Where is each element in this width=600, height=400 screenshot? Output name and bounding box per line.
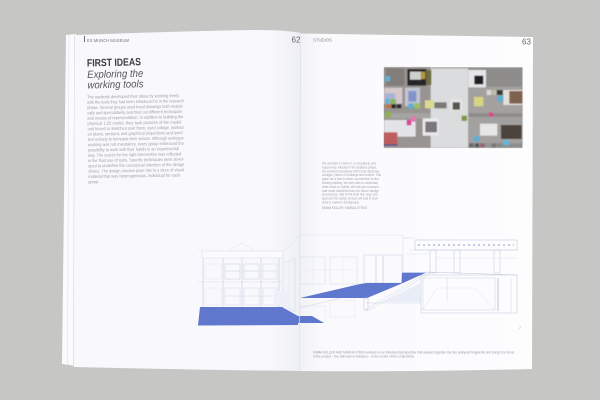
text block: intro body copy: phase. Several groups used hand drawings both analyti- [87, 104, 184, 110]
text block: student quote [322, 162, 381, 210]
running head: right: STUDIOS [313, 38, 332, 42]
caption: EMMA KELLER AND MARIJA STEKS worked on an interlaced perspective that weaves together the two analysed fragments and brings the focus [313, 350, 514, 354]
text block: intro body copy: oped to underline the conceptual intention of the design [88, 162, 185, 168]
text block: intro body copy: cally and speculatively and tried out different techniques [87, 109, 183, 115]
heading: first ideas: FIRST IDEAS [87, 56, 141, 69]
text block: student quote: more varied analyses. [322, 200, 360, 204]
text block: student quote: approach the design process will lead to even [322, 197, 378, 201]
text block: student quote: logical way. Already in the analysis phase, [322, 165, 377, 169]
drawing: right structure section [364, 238, 517, 313]
text block: intro body copy: in the fluid use of tools. Specific techniques were devel- [88, 157, 185, 163]
panel: right page [299, 34, 533, 371]
heading: first ideas: working tools [87, 78, 144, 91]
text block: student quote: gave us a much closer connection to the [322, 177, 379, 181]
text block: intro body copy: group. [88, 179, 99, 184]
drawing: blue floor plane left [198, 307, 324, 326]
text block: intro body copy: way. The search for the right intervention was reflected [88, 151, 181, 158]
drawing: left building elevation [198, 237, 300, 312]
text block: student quote: We decided to work in a completely and [322, 162, 376, 166]
text block: student quote: rate hand sketches into our future design [322, 189, 379, 193]
page number 63: 63 [522, 38, 531, 46]
text block: intro body copy: with the tools they had been introduced to in the research [87, 98, 185, 105]
photo: pinboard collage [384, 67, 522, 148]
text block: intro body copy: and means of representation. In addition to building the [87, 114, 184, 121]
text block: intro body copy: material that was heterogeneous, individual for each [88, 173, 181, 179]
heading: first ideas [87, 56, 144, 91]
heading: first ideas: Exploring the [87, 68, 143, 81]
book gutter [300, 33, 301, 371]
text block: intro body copy: The students developed their ideas by working freely [87, 93, 180, 99]
running head: left [84, 36, 129, 43]
text block: student quote: processes. We think that the way you [322, 193, 378, 197]
text block: student quote: existing building. We were able to continually [322, 181, 378, 185]
book page stack edge [62, 34, 76, 367]
text block: intro body copy: and traced or sketched over them, used collage, worked [87, 125, 184, 131]
text block: intro body copy: choice. The design process gave rise to a store of visual [88, 167, 184, 174]
text block: intro body copy: on plans, sections and graphical projections and used [88, 130, 183, 137]
caption: of the project – the staircase in-between – to the centre of the composition. [313, 354, 415, 358]
caption [313, 350, 514, 358]
drawing: white stair ramp [365, 272, 430, 310]
text block: intro body copy: physical 1:25 model, they took pictures of the model [87, 120, 181, 126]
running head: left: EX MUNCH MUSEUM [87, 38, 129, 43]
text block: student quote: we worked exclusively with hand sketches, [322, 169, 380, 173]
small footnote mark: 7 [519, 326, 521, 330]
text block: student quote: collages, pieces of drawings and models. This [322, 173, 381, 177]
drawing: central building windows [300, 235, 403, 322]
text block: student quote: refer back to reality. We will also incorpo- [322, 185, 381, 189]
drawing: interlaced architectural perspective [198, 235, 517, 326]
drawing: blue ramp plane centre [300, 273, 426, 298]
drawing: pale shadow under ramp [384, 283, 421, 302]
text block: intro body copy: possibility to work with their hands in an experimental [88, 146, 179, 152]
text block: intro body copy: working was not mandatory, every group embraced the [88, 141, 184, 147]
panel: left page [74, 30, 301, 371]
text block: intro body copy [87, 93, 186, 184]
text block: intro body copy: text actively to formulate their visions. Although analogue [88, 135, 184, 142]
text block: student quote: EMMA KELLER, MARIJA STEKS [322, 206, 368, 210]
page number 62: 62 [292, 36, 301, 44]
